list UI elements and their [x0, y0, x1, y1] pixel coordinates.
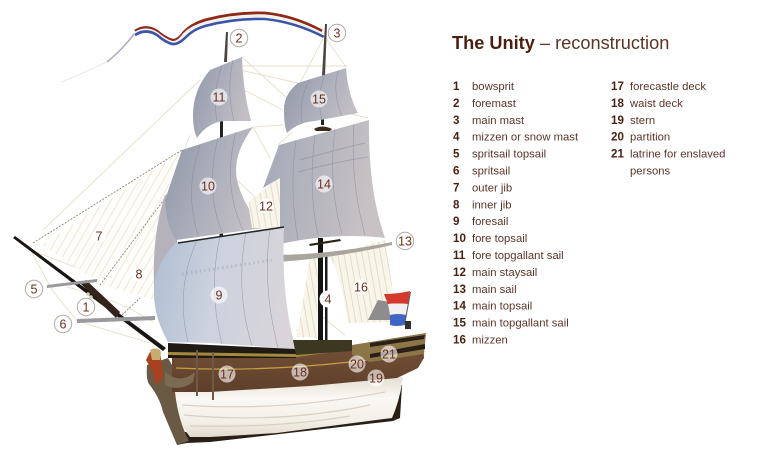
label 9: 9: [216, 288, 223, 302]
legend column 1: 11: [453, 249, 466, 262]
label 1: [77, 298, 95, 316]
label 18: 18: [293, 366, 307, 380]
label 15: [310, 90, 328, 108]
sail 14: main topsail: [263, 120, 385, 244]
pennant: [62, 13, 324, 82]
rigging lines: [28, 37, 368, 345]
legend column 1: fore topsail: [472, 233, 527, 245]
legend column 1: foresail: [472, 216, 508, 228]
legend column 1: mizzen or snow mast: [472, 132, 579, 144]
label 11: [210, 88, 228, 106]
yard: spritsail topsail: [47, 279, 97, 288]
label 4: 4: [325, 292, 332, 306]
label 3: 3: [334, 26, 341, 40]
legend column 1: mizzen: [472, 334, 508, 346]
sail 11: fore topgallant: [193, 57, 251, 138]
legend column 1: 4: [453, 131, 460, 144]
label 21: [380, 346, 398, 362]
sail 16: mizzen: [330, 240, 392, 323]
legend column 1: main staysail: [472, 267, 537, 279]
label 11: 11: [213, 90, 226, 104]
hull: keel and stem: [177, 385, 402, 445]
hull: brown planking: [172, 335, 424, 392]
label 2: 2: [236, 32, 243, 46]
legend column 1: spritsail topsail: [472, 149, 546, 161]
legend column 1: bowsprit: [472, 81, 515, 93]
legend column 1: 6: [453, 164, 460, 178]
label 13: 13: [398, 234, 412, 248]
legend column 2: 21: [611, 148, 624, 161]
legend column 1: 9: [453, 215, 460, 228]
legend column 2: stern: [630, 115, 655, 127]
spar: foremast: [220, 32, 228, 236]
legend column 1: 16: [453, 334, 466, 346]
yard: main sail furled (13): [278, 242, 392, 262]
label 20: [348, 356, 366, 372]
label 7: [92, 229, 106, 244]
legend column 1: [453, 80, 579, 346]
label 13: [396, 232, 414, 250]
label 17: [218, 366, 236, 382]
label 10: [200, 178, 216, 194]
label 16: 16: [354, 280, 368, 294]
legend column 2: 18: [611, 97, 624, 110]
legend column 2: 19: [611, 114, 624, 127]
legend column 1: 12: [453, 266, 466, 279]
legend column 1: 1: [453, 80, 460, 93]
legend column 2: waist deck: [629, 98, 683, 110]
legend column 1: spritsail: [472, 166, 510, 178]
legend column 1: foremast: [472, 98, 517, 110]
label 10: 10: [201, 180, 215, 194]
hull: head beak: [147, 358, 189, 445]
sail 10: fore topsail: [165, 127, 263, 240]
deck: rail and bulwark: [168, 333, 426, 400]
label 14: 14: [317, 178, 331, 192]
label 1: 1: [83, 300, 90, 314]
label 5: 5: [31, 282, 38, 296]
label 3: [328, 24, 346, 42]
legend column 1: 14: [453, 300, 466, 313]
label 14: [316, 176, 332, 192]
hull: lower white body: [173, 377, 403, 437]
legend column 1: 3: [453, 114, 460, 127]
mizzen staysail shrouds: [297, 257, 318, 337]
label 18: [292, 364, 308, 380]
legend column 1: 2: [453, 97, 459, 110]
legend column 1: main sail: [472, 284, 517, 296]
legend column 1: main topgallant sail: [472, 318, 569, 330]
label 15: 15: [312, 92, 326, 106]
legend column 1: 5: [453, 148, 460, 161]
label 4: [320, 290, 336, 308]
legend column 2: 17: [611, 80, 624, 93]
legend column 1: inner jib: [472, 199, 512, 211]
label 8: 8: [136, 268, 143, 282]
label 9: [210, 286, 228, 304]
label 8: [132, 267, 146, 282]
label 5: [25, 280, 43, 298]
shaded back of fore sail: [154, 190, 178, 305]
sail 15: main topgallant: [284, 68, 358, 133]
sail 7: outer jib: [43, 150, 182, 282]
legend column 1: 7: [453, 181, 459, 194]
figurehead: [146, 348, 163, 385]
dashed stay lines on jibs: [33, 150, 190, 315]
sail 12: main staysail: [248, 177, 280, 228]
stern flag: [384, 291, 411, 329]
bowsprit: [13, 236, 166, 351]
legend column 1: main mast: [472, 115, 525, 127]
legend column 1: 10: [453, 232, 466, 245]
legend column 2: partition: [630, 132, 670, 144]
legend column 2: [611, 80, 725, 178]
label 6: [54, 315, 72, 333]
label 19: 19: [369, 372, 383, 386]
legend column 2: forecastle deck: [630, 81, 706, 93]
legend column 1: fore topgallant sail: [472, 250, 564, 262]
legend column 1: 8: [453, 198, 460, 211]
yard: spritsail: [77, 316, 155, 323]
hull: beak rail: [165, 372, 195, 388]
legend column 1: 15: [453, 317, 466, 330]
label 20: 20: [350, 358, 364, 372]
sail 9: foresail: [154, 227, 296, 349]
label 21: 21: [382, 348, 396, 362]
spar: main mast top: [314, 24, 332, 131]
legend column 1: outer jib: [472, 182, 512, 194]
label 17: 17: [220, 368, 234, 382]
label 7: 7: [96, 230, 103, 244]
label 2: [230, 29, 248, 47]
legend column 2: 20: [611, 131, 624, 144]
label 6: 6: [60, 318, 67, 332]
label 12: 12: [259, 200, 273, 214]
label 19: [368, 370, 384, 386]
legend column 2: persons: [630, 166, 671, 178]
legend column 1: 13: [453, 283, 466, 296]
legend column 2: latrine for enslaved: [630, 149, 725, 161]
legend column 1: main topsail: [472, 301, 532, 313]
hull: yellow wale: [176, 352, 424, 369]
mast: main and mizzen: [309, 238, 341, 341]
sail 8: inner jib: [102, 168, 183, 303]
title: The Unity – reconstruction: [452, 33, 669, 53]
